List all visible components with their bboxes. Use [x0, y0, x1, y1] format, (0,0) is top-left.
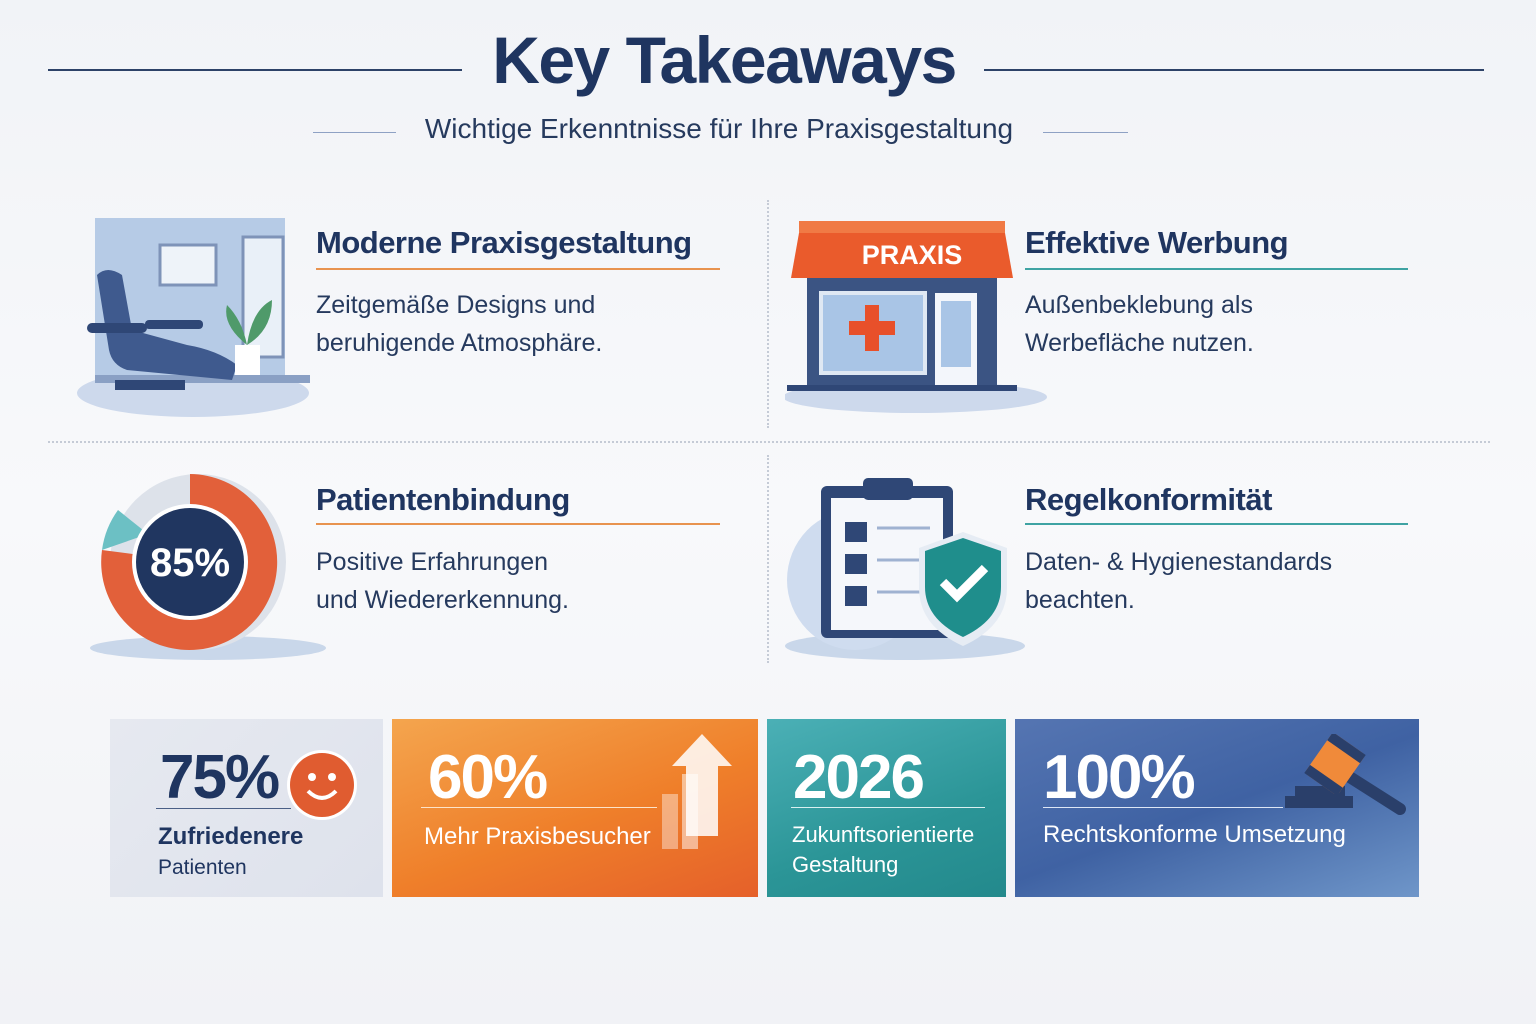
- icon: praxis storefront: PRAXIS: [862, 240, 962, 270]
- heading: Patientenbindung: [316, 482, 570, 517]
- text: [316, 291, 602, 357]
- card: 75%: Zufriedenere: [158, 823, 303, 850]
- text: beruhigende Atmosphäre.: [316, 329, 602, 357]
- card: 75%: Patienten: [158, 856, 247, 879]
- icon: up arrows: [662, 734, 732, 849]
- text: [1025, 548, 1332, 614]
- card: 2026: Gestaltung: [792, 852, 898, 877]
- text: [316, 548, 569, 614]
- icon: clipboard and shield: [785, 478, 1025, 660]
- subtitle: Wichtige Erkenntnisse für Ihre Praxisgestaltung: [425, 113, 1013, 144]
- panel: Regelkonformität: [785, 478, 1408, 660]
- text: Außenbeklebung als: [1025, 291, 1253, 319]
- text: und Wiedererkennung.: [316, 586, 569, 614]
- card: 60%: [392, 719, 758, 897]
- icon: gavel: [1285, 734, 1406, 815]
- panel: Effektive Werbung: [785, 221, 1408, 413]
- heading: Moderne Praxisgestaltung: [316, 225, 692, 260]
- text: Daten- & Hygienestandards: [1025, 548, 1332, 576]
- card: 2026: [767, 719, 1006, 897]
- text: beachten.: [1025, 586, 1135, 614]
- card: 100%: [1015, 719, 1419, 897]
- card: 60%: Mehr Praxisbesucher: [424, 823, 651, 850]
- card: 100%: Rechtskonforme Umsetzung: [1043, 821, 1346, 848]
- text: [1025, 291, 1254, 357]
- chart: donut 85%: 85%: [150, 541, 230, 585]
- icon: smiley: [287, 750, 357, 820]
- card: 100%: 100%: [1043, 743, 1194, 812]
- panel: Patientenbindung: [90, 474, 720, 660]
- card: 2026: Zukunftsorientierte: [792, 822, 974, 847]
- icon: treatment room: [77, 218, 310, 417]
- text: Werbefläche nutzen.: [1025, 329, 1254, 357]
- icon: praxis storefront: [785, 221, 1047, 413]
- title: Key Takeaways: [492, 23, 956, 97]
- text: Zeitgemäße Designs und: [316, 291, 595, 319]
- heading: Regelkonformität: [1025, 482, 1272, 517]
- text: Positive Erfahrungen: [316, 548, 548, 576]
- heading: Effektive Werbung: [1025, 225, 1288, 260]
- card: 60%: 60%: [428, 743, 546, 812]
- panel: Moderne Praxisgestaltung: [77, 218, 720, 417]
- card: 75%: [110, 719, 383, 897]
- card: 2026: 2026: [793, 743, 923, 812]
- card: 75%: 75%: [160, 743, 278, 812]
- chart: donut 85%: [90, 474, 326, 660]
